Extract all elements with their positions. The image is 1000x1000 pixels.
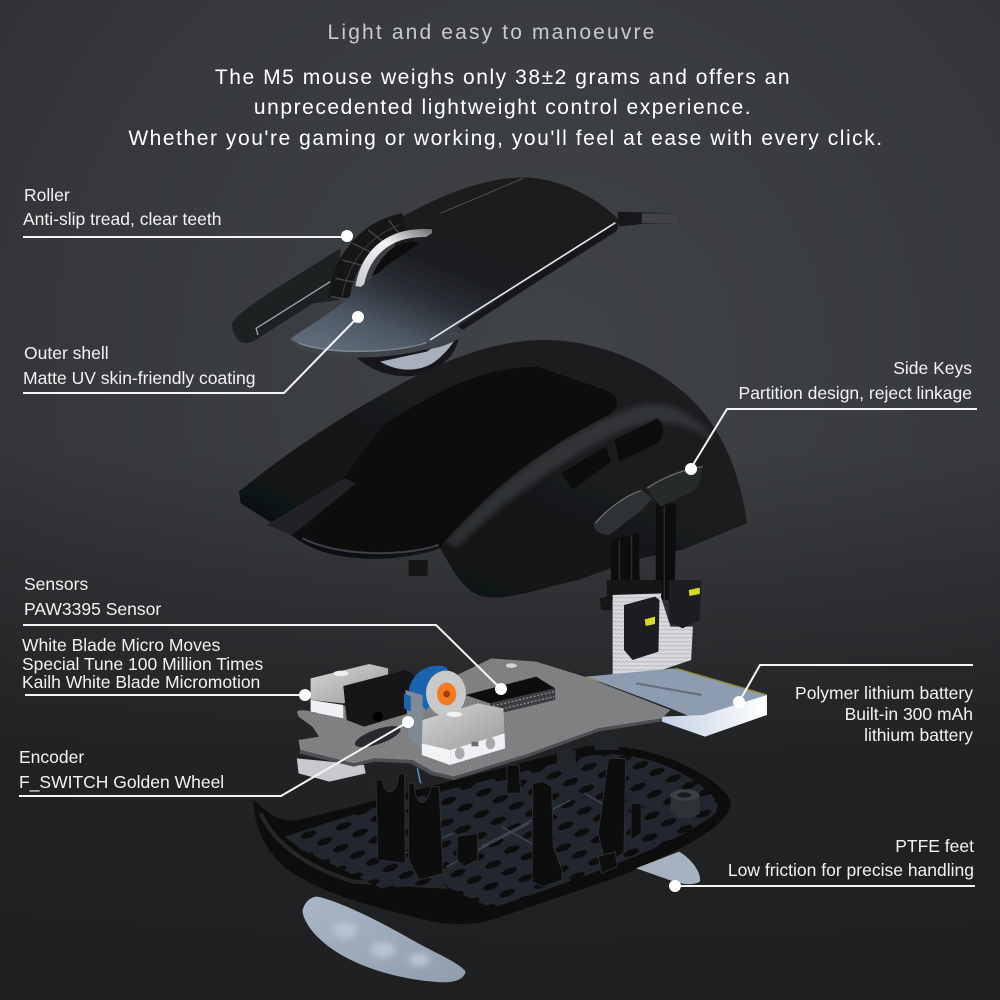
pin [409, 560, 428, 576]
illustration: flex cable with side key switches [600, 580, 701, 683]
callout: side keys: Partition design, reject linkage [739, 383, 972, 403]
callout: micro switches: Special Tune 100 Million Times [22, 654, 263, 674]
top opening [303, 367, 617, 554]
callout: roller [23, 185, 353, 242]
cable [618, 212, 679, 227]
right button [291, 178, 618, 354]
callout: roller: Anti-slip tread, clear teeth [23, 209, 221, 229]
callout: roller: Roller [24, 185, 70, 205]
callout: PTFE feet: Low friction for precise handling [728, 860, 974, 880]
title: Light and easy to manoeuvre [328, 21, 656, 44]
intro text block [128, 66, 884, 150]
front micro switch [422, 703, 505, 765]
illustration: top shell exploded [232, 177, 679, 376]
upper sheen [444, 404, 716, 548]
callout: encoder: F_SWITCH Golden Wheel [19, 772, 224, 793]
top strip and rear panel [392, 177, 620, 330]
illustration: battery [586, 668, 767, 737]
PTFE foot right [636, 852, 700, 884]
left button [232, 248, 341, 343]
pcb [297, 658, 670, 777]
side slots [614, 418, 663, 462]
callout: encoder [19, 716, 414, 796]
scroll wheel tread [331, 220, 432, 300]
callout: battery: lithium battery [864, 725, 973, 745]
callout: micro switches [22, 635, 311, 701]
callout: sensors: PAW3395 Sensor [24, 599, 161, 619]
illustration: middle shell [239, 340, 747, 598]
inner cutouts [473, 377, 592, 448]
intro text block: Whether you're gaming or working, you'll feel at ease with every click. [128, 127, 884, 150]
lower switch [297, 758, 366, 782]
tray floor with hex holes [285, 754, 717, 908]
intro text block: The M5 mouse weighs only 38±2 grams and offers an [215, 66, 791, 89]
callout: outer shell [23, 311, 364, 393]
illustration: bottom tray [254, 737, 731, 924]
left micro switch [311, 664, 414, 727]
callout: battery: Polymer lithium battery [795, 683, 973, 703]
callout: sensors [23, 574, 507, 695]
callout: sensors: Sensors [24, 574, 88, 594]
encoder [404, 666, 466, 783]
callout: battery [733, 665, 973, 745]
callout: micro switches: Kailh White Blade Micromotion [22, 672, 260, 692]
illustration: circuit board with switches [297, 658, 670, 783]
intro text block: unprecedented lightweight control experience. [254, 96, 752, 119]
screw post [670, 789, 700, 818]
standoffs [557, 737, 619, 770]
callout: micro switches: White Blade Micro Moves [22, 635, 221, 655]
callout: side keys: Side Keys [893, 358, 972, 378]
shell silhouette [239, 340, 747, 598]
callout: outer shell: Matte UV skin-friendly coating [23, 368, 255, 388]
PTFE foot left [303, 897, 466, 982]
wheel underside crescent [356, 330, 459, 376]
sensor chip [466, 677, 555, 715]
callout: side keys [685, 358, 977, 475]
illustration: side keys [594, 467, 703, 600]
pillars [376, 758, 641, 887]
post [428, 370, 435, 385]
callout: encoder: Encoder [19, 747, 84, 767]
callout: battery: Built-in 300 mAh [845, 704, 973, 724]
thumb grip [266, 478, 356, 535]
callout: outer shell: Outer shell [24, 343, 109, 363]
callout: PTFE feet [669, 836, 975, 892]
ribs [388, 793, 619, 867]
tray rim [254, 745, 731, 924]
callout: PTFE feet: PTFE feet [895, 836, 974, 856]
